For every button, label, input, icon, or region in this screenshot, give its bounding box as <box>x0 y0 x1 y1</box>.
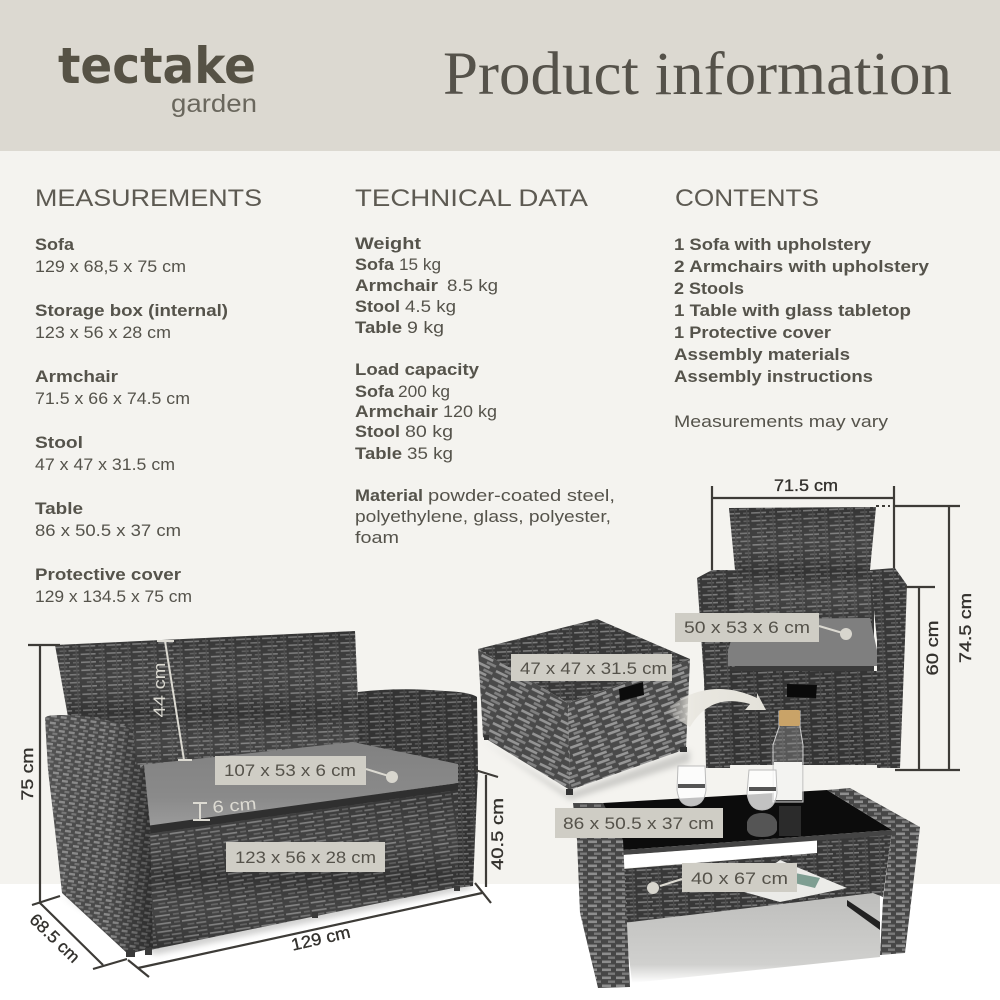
weight list: Armchair <box>355 276 438 295</box>
label: shelf size: 40 x 67 cm <box>691 869 788 888</box>
weight list: 15 kg <box>399 255 441 274</box>
stool shadow <box>482 740 690 800</box>
armchair backrest <box>729 507 876 625</box>
water glass right <box>747 770 777 837</box>
74.5 cm dimension <box>894 506 975 770</box>
6 cm cushion dimension <box>193 794 257 820</box>
label: cushion size <box>215 756 398 785</box>
60 cm dimension: 60 cm <box>923 620 942 676</box>
table glass top <box>603 790 892 855</box>
68.5 cm dimension: 68.5 cm <box>26 910 84 967</box>
armchair left arm <box>697 570 735 768</box>
measurement: table <box>35 499 181 540</box>
table inner side panel <box>817 830 892 897</box>
measurement: storage box <box>35 301 228 342</box>
measurement: sofa: 129 x 68,5 x 75 cm <box>35 257 186 276</box>
measurement: table: Table <box>35 499 83 518</box>
sofa floor shadow <box>60 880 475 955</box>
header band <box>0 0 1000 151</box>
armchair stool handle <box>787 684 817 698</box>
table floor shadow <box>625 890 880 983</box>
weight list: Sofa <box>355 255 395 274</box>
table left leg <box>573 803 630 988</box>
armchair right arm <box>870 568 907 768</box>
129 cm dimension <box>128 883 491 977</box>
armchair with dimensions <box>675 476 975 770</box>
label: table size: 86 x 50.5 x 37 cm <box>563 814 714 833</box>
weight list: 9 kg <box>407 318 444 337</box>
note: Measurements may vary <box>674 412 889 431</box>
load capacity list: 120 kg <box>443 402 497 421</box>
measurement: stool: 47 x 47 x 31.5 cm <box>35 455 175 474</box>
load capacity list <box>355 360 497 463</box>
weight list: 8.5 kg <box>447 276 498 295</box>
measurement: armchair: Armchair <box>35 367 118 386</box>
contents list: 2 Armchairs with upholstery <box>674 257 930 276</box>
stool left face <box>478 649 570 790</box>
weight list <box>355 234 498 337</box>
stool right face <box>568 659 690 790</box>
material text: foam <box>355 528 399 547</box>
contents list: 2 Stools <box>674 279 744 298</box>
contents list <box>674 235 930 386</box>
load capacity list: 80 kg <box>405 422 453 441</box>
measurement: stool: Stool <box>35 433 83 452</box>
weight list: Stool <box>355 297 400 316</box>
table <box>555 710 920 988</box>
logo: tectake garden <box>58 37 257 118</box>
40.5 cm dimension <box>475 770 507 887</box>
measurement: armchair: 71.5 x 66 x 74.5 cm <box>35 389 190 408</box>
table shelf <box>623 853 873 923</box>
panel: measurements <box>35 185 262 606</box>
contents list: 1 Table with glass tabletop <box>674 301 911 320</box>
measurement: protective cover <box>35 565 192 606</box>
panel: contents <box>674 185 930 431</box>
armchair label: 50 x 53 x 6 cm <box>684 618 810 637</box>
logo: tectake garden: tectake <box>58 37 256 95</box>
measurement: armchair <box>35 367 190 408</box>
panel: technical data <box>355 185 615 547</box>
sofa cushion <box>140 742 458 834</box>
load capacity list: Load capacity <box>355 360 480 379</box>
weight list: 4.5 kg <box>405 297 456 316</box>
load capacity list: Stool <box>355 422 400 441</box>
material text: Material <box>355 486 423 505</box>
material text: powder-coated steel, <box>428 486 615 505</box>
material text <box>355 486 615 547</box>
arrow from stool to armchair <box>665 689 766 727</box>
heading: technical data: TECHNICAL DATA <box>355 185 588 212</box>
6 cm cushion dimension: 6 cm <box>212 794 257 817</box>
weight list: Table <box>355 318 402 337</box>
measurement: protective cover: Protective cover <box>35 565 181 584</box>
contents list: 1 Protective cover <box>674 323 831 342</box>
magazine on shelf <box>737 860 847 902</box>
measurement: sofa <box>35 235 186 276</box>
heading: measurements: MEASUREMENTS <box>35 185 262 212</box>
sofa right arm <box>358 689 478 888</box>
load capacity list: Table <box>355 444 402 463</box>
sofa backrest <box>55 631 360 780</box>
armchair label <box>675 613 852 642</box>
stool handle <box>619 682 644 701</box>
measurement: storage box: Storage box (internal) <box>35 301 228 320</box>
load capacity list: Sofa <box>355 382 395 401</box>
sofa with dimensions <box>18 631 507 977</box>
stool feet <box>484 735 687 795</box>
contents list: Assembly materials <box>674 345 850 364</box>
table right leg <box>827 788 920 955</box>
heading: contents: CONTENTS <box>675 185 819 212</box>
74.5 cm dimension: 74.5 cm <box>956 593 975 663</box>
label: shelf size <box>647 863 797 894</box>
load capacity list: 35 kg <box>407 444 453 463</box>
label: storage size: 123 x 56 x 28 cm <box>235 848 376 867</box>
armchair stool front <box>729 671 877 765</box>
load capacity list: 200 kg <box>398 382 450 401</box>
load capacity list: Armchair <box>355 402 438 421</box>
measurement: protective cover: 129 x 134.5 x 75 cm <box>35 587 192 606</box>
71.5 cm dimension: 71.5 cm <box>774 476 838 495</box>
stool <box>478 619 690 800</box>
title: Product information <box>443 41 952 108</box>
label: stool size: 47 x 47 x 31.5 cm <box>520 659 667 678</box>
sofa left arm <box>45 715 153 954</box>
measurement: storage box: 123 x 56 x 28 cm <box>35 323 171 342</box>
water glass left <box>677 766 706 806</box>
contents list: 1 Sofa with upholstery <box>674 235 872 254</box>
gap under glass <box>624 841 817 868</box>
measurement: sofa: Sofa <box>35 235 75 254</box>
logo: tectake garden: garden <box>171 90 257 118</box>
material text: polyethylene, glass, polyester, <box>355 507 611 526</box>
label: table size <box>555 808 723 838</box>
stool top <box>478 619 690 703</box>
40.5 cm dimension: 40.5 cm <box>488 798 507 870</box>
weight list: Weight <box>355 234 421 253</box>
label: cushion size: 107 x 53 x 6 cm <box>224 761 356 780</box>
60 cm dimension <box>905 587 942 770</box>
75 cm dimension <box>18 645 60 903</box>
sofa feet <box>126 886 460 957</box>
table rear brace <box>847 900 880 930</box>
sofa storage box front <box>146 788 458 950</box>
carafe <box>773 710 803 836</box>
44 cm backrest dimension <box>150 641 192 760</box>
68.5 cm dimension <box>26 896 127 969</box>
contents list: Assembly instructions <box>674 367 873 386</box>
measurement: table: 86 x 50.5 x 37 cm <box>35 521 181 540</box>
measurement: stool <box>35 433 175 474</box>
44 cm backrest dimension: 44 cm <box>150 662 169 718</box>
armchair underlay <box>732 572 874 765</box>
label: stool size <box>511 654 672 681</box>
armchair cushion <box>728 618 877 666</box>
label: storage size <box>226 842 385 872</box>
129 cm dimension: 129 cm <box>289 923 352 955</box>
71.5 cm dimension <box>712 476 894 570</box>
75 cm dimension: 75 cm <box>18 748 37 800</box>
